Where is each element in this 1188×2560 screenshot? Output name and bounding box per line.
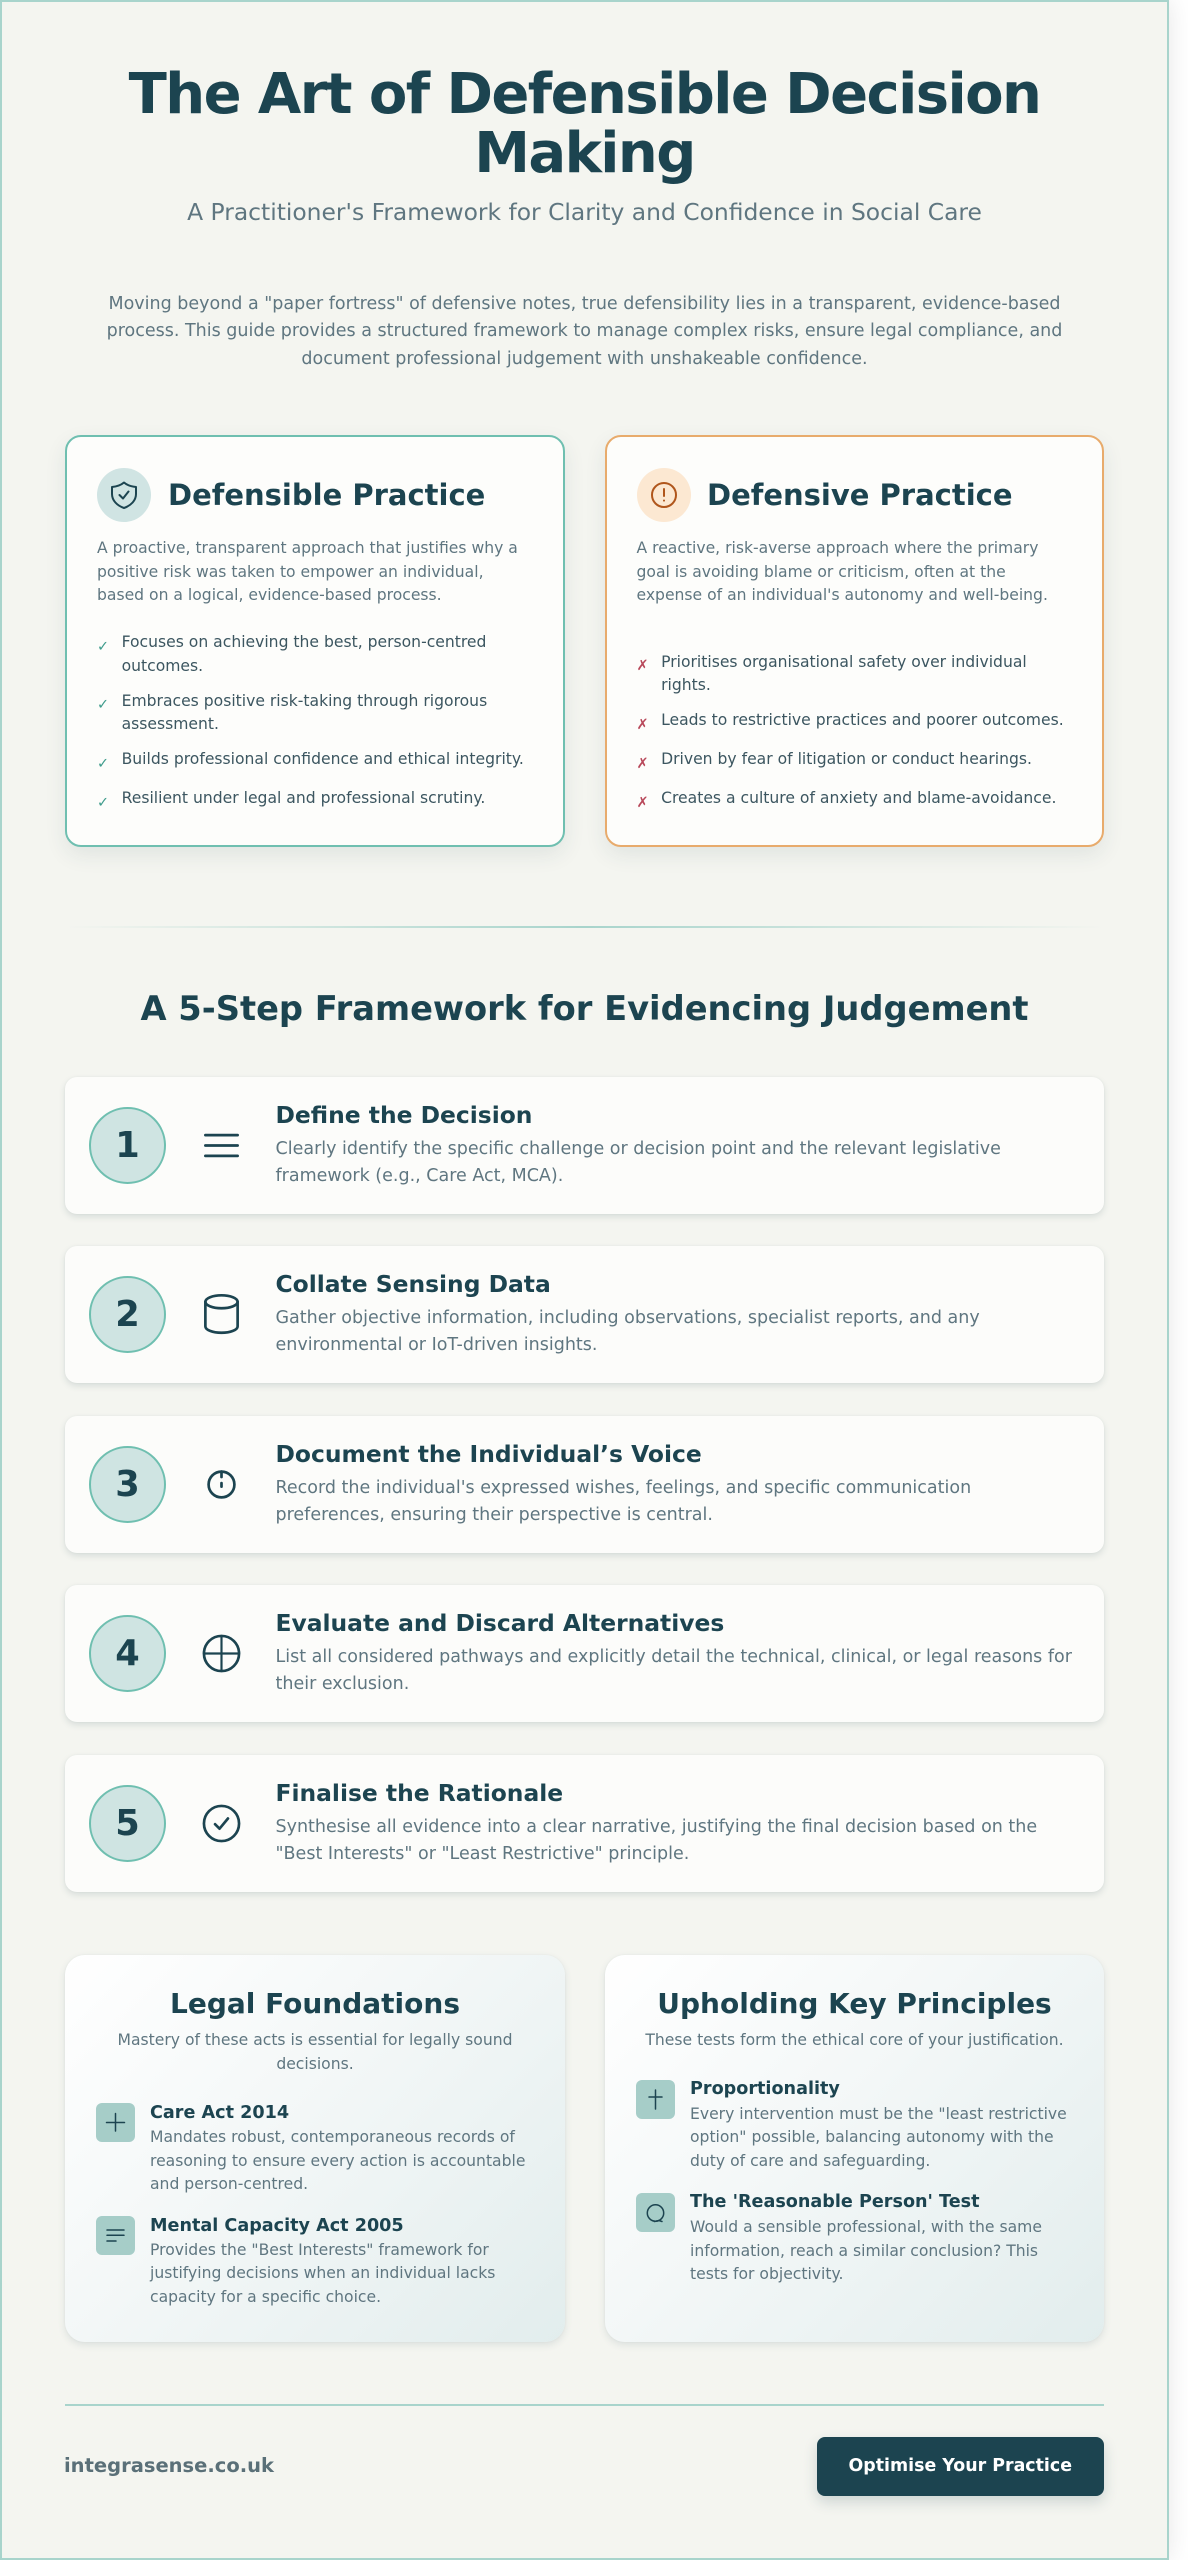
step 3 <box>65 1416 1104 1553</box>
panel heading: Legal Foundations <box>170 1987 460 2020</box>
intro paragraph <box>107 294 1062 369</box>
item title: Care Act 2014 <box>150 2103 289 2123</box>
step title: Collate Sensing Data <box>276 1270 551 1298</box>
description: A proactive, transparent approach that justifies why a <box>97 539 518 557</box>
section heading: A 5-Step Framework for Evidencing Judgement <box>140 989 1028 1028</box>
icon: alert circle <box>636 468 690 522</box>
item description: justifying decisions when an individual lacks <box>150 2264 495 2282</box>
number badge: 5 <box>115 1803 140 1844</box>
step description: Record the individual's expressed wishes, feelings, and specific communication <box>276 1478 971 1498</box>
item description: Mandates robust, contemporaneous records of <box>150 2128 515 2146</box>
panel: defensive practice: ✗ <box>636 658 649 674</box>
step description: List all considered pathways and explicitly detail the technical, clinical, or legal reasons for <box>276 1647 1072 1667</box>
intro paragraph: process. This guide provides a structured framework to manage complex risks, ensure legal compliance, and <box>107 321 1062 341</box>
icon: circle check <box>202 1804 240 1842</box>
subtitle: A Practitioner's Framework for Clarity and Confidence in Social Care <box>187 198 982 226</box>
step description <box>276 1308 980 1355</box>
title: The Art of Defensible Decision <box>129 62 1040 127</box>
panel intro: decisions. <box>276 2054 354 2072</box>
description: expense of an individual's autonomy and well-being. <box>636 586 1048 604</box>
number badge: 1 <box>115 1125 140 1166</box>
icon: dagger cross <box>636 2080 675 2119</box>
number badge <box>89 1107 166 1184</box>
list item <box>636 652 1027 694</box>
panel: defensible practice: Focuses on achieving the best, person-centred <box>122 633 486 651</box>
step description: Synthesise all evidence into a clear narrative, justifying the final decision based on the <box>276 1817 1037 1837</box>
list item <box>636 711 1064 732</box>
panel: defensive practice: rights. <box>661 676 711 694</box>
panel intro: These tests form the ethical core of your justification. <box>645 2031 1064 2049</box>
panel: defensible practice: assessment. <box>122 715 219 733</box>
step description: framework (e.g., Care Act, MCA). <box>276 1166 563 1186</box>
item description: capacity for a specific choice. <box>150 2288 381 2306</box>
step description: environmental or IoT-driven insights. <box>276 1335 597 1355</box>
list item <box>636 750 1032 772</box>
intro paragraph: Moving beyond a "paper fortress" of defensive notes, true defensibility lies in a transparent, evidence-based <box>108 294 1061 314</box>
list item <box>97 750 524 772</box>
step title: Document the Individual’s Voice <box>276 1440 702 1468</box>
panel: defensive practice: ✗ <box>636 794 649 810</box>
description: goal is avoiding blame or criticism, often at the <box>636 562 1006 580</box>
panel: defensible practice: Resilient under legal and professional scrutiny. <box>122 789 485 807</box>
number badge <box>89 1785 166 1862</box>
item description: reasoning to ensure every action is accountable <box>150 2152 525 2170</box>
number badge <box>89 1276 166 1353</box>
description <box>636 539 1048 604</box>
heading: Defensible Practice <box>168 478 485 512</box>
step 4 <box>65 1585 1104 1722</box>
step description <box>276 1139 1001 1186</box>
panel: defensive practice: Leads to restrictive practices and poorer outcomes. <box>661 711 1064 729</box>
panel: defensive practice: ✗ <box>636 756 649 772</box>
panel: defensible practice <box>65 435 564 847</box>
step description <box>276 1478 971 1525</box>
item description <box>690 2105 1067 2170</box>
item description: information, reach a similar conclusion? This <box>690 2242 1038 2260</box>
item title: The 'Reasonable Person' Test <box>690 2192 980 2212</box>
panel: key principles <box>604 1955 1104 2342</box>
list item <box>97 633 486 674</box>
step 1 <box>65 1077 1104 1214</box>
footer website: integrasense.co.uk <box>64 2454 274 2477</box>
step title: Finalise the Rationale <box>276 1779 563 1807</box>
icon: text lines <box>96 2216 135 2255</box>
icon: circle plus <box>202 1634 240 1672</box>
item description: and person-centred. <box>150 2175 308 2193</box>
step description: Clearly identify the specific challenge or decision point and the relevant legislative <box>276 1139 1001 1159</box>
panel intro <box>118 2031 512 2072</box>
description <box>97 539 518 604</box>
number badge: 2 <box>115 1294 140 1335</box>
list item <box>97 789 485 810</box>
panel: defensive practice <box>604 435 1104 847</box>
icon: circle with marks <box>207 1470 236 1499</box>
step description <box>276 1647 1072 1694</box>
item title: Mental Capacity Act 2005 <box>150 2216 404 2236</box>
step 2 <box>65 1246 1104 1383</box>
list item <box>97 692 487 733</box>
item description: Provides the "Best Interests" framework for <box>150 2241 489 2259</box>
call to action button <box>816 2437 1104 2496</box>
intro paragraph: document professional judgement with unshakeable confidence. <box>301 349 868 369</box>
panel: defensive practice: Prioritises organisational safety over individual <box>661 652 1027 670</box>
panel heading: Upholding Key Principles <box>657 1987 1052 2020</box>
icon: shield with check <box>97 468 151 522</box>
item description: Every intervention must be the "least restrictive <box>690 2105 1067 2123</box>
item title: Proportionality <box>690 2079 840 2099</box>
title: Making <box>474 121 695 186</box>
step title: Define the Decision <box>276 1101 532 1129</box>
heading: Defensive Practice <box>707 478 1013 512</box>
panel: legal foundations <box>65 1955 564 2342</box>
step 5 <box>65 1755 1104 1892</box>
number badge: 3 <box>115 1464 140 1505</box>
step description: "Best Interests" or "Least Restrictive" principle. <box>276 1844 689 1864</box>
step description: preferences, ensuring their perspective is central. <box>276 1505 713 1525</box>
panel: defensive practice: Creates a culture of anxiety and blame-avoidance. <box>661 789 1056 807</box>
panel: defensible practice: ✓ <box>97 756 109 772</box>
number badge <box>89 1615 166 1692</box>
panel: defensive practice: ✗ <box>636 716 649 732</box>
panel: defensible practice: outcomes. <box>122 656 203 674</box>
call to action button: Optimise Your Practice <box>848 2456 1072 2476</box>
panel: defensive practice: Driven by fear of litigation or conduct hearings. <box>661 750 1032 768</box>
panel: defensible practice: ✓ <box>97 697 109 713</box>
item description <box>150 2241 495 2306</box>
item description: duty of care and safeguarding. <box>690 2152 930 2170</box>
panel: defensible practice: ✓ <box>97 638 109 654</box>
icon: magnifier ring <box>636 2193 675 2232</box>
description: A reactive, risk-averse approach where the primary <box>636 539 1038 557</box>
panel intro: Mastery of these acts is essential for legally sound <box>118 2031 512 2049</box>
icon: plus <box>96 2103 135 2142</box>
panel: defensible practice: Embraces positive risk-taking through rigorous <box>122 692 487 710</box>
number badge <box>89 1446 166 1523</box>
item description: option" possible, balancing autonomy with the <box>690 2128 1054 2146</box>
item description: tests for objectivity. <box>690 2265 843 2283</box>
step description: Gather objective information, including observations, specialist reports, and any <box>276 1308 980 1328</box>
icon: lines <box>204 1134 239 1158</box>
step description: their exclusion. <box>276 1674 409 1694</box>
title <box>128 62 1040 186</box>
item description <box>150 2128 525 2193</box>
step description <box>276 1817 1037 1864</box>
list item <box>636 789 1056 810</box>
item description: Would a sensible professional, with the same <box>690 2218 1042 2236</box>
step title: Evaluate and Discard Alternatives <box>276 1609 724 1637</box>
description: based on a logical, evidence-based process. <box>97 586 442 604</box>
item description <box>690 2218 1042 2283</box>
panel: defensible practice: Builds professional confidence and ethical integrity. <box>122 750 524 768</box>
panel: defensible practice: ✓ <box>97 794 109 810</box>
icon: database <box>204 1294 239 1334</box>
description: positive risk was taken to empower an individual, <box>97 562 484 580</box>
number badge: 4 <box>115 1633 140 1674</box>
